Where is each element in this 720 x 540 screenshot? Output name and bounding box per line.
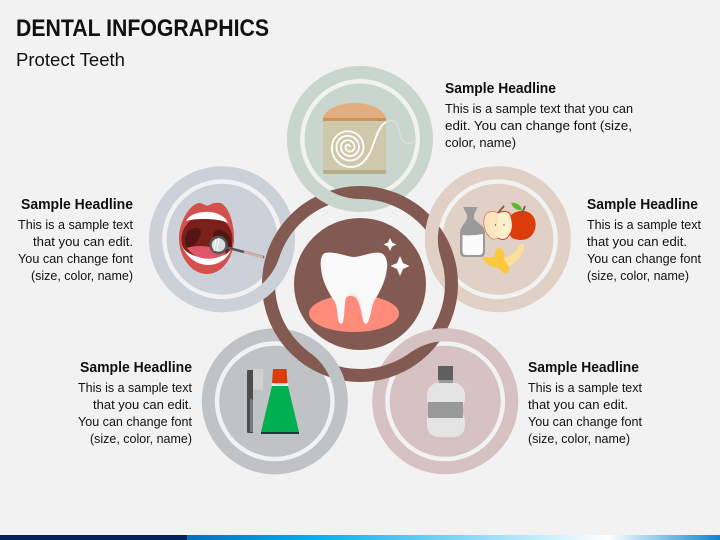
panel: dental floss circle [287, 66, 433, 212]
icon: dental floss [323, 103, 416, 174]
icon: toothpaste [261, 369, 299, 434]
icon: mouthwash bottle [427, 366, 465, 437]
panel: oral checkup circle [149, 166, 295, 312]
text block: left: This is a sample text [18, 217, 133, 232]
title: DENTAL INFOGRAPHICS [16, 15, 269, 42]
text block: bottom left: You can change font [78, 414, 192, 429]
text block: bottom right: You can change font [528, 414, 642, 429]
panel: healthy food circle [425, 166, 571, 312]
interlocking band: mouthwash circle over ring [406, 308, 538, 455]
text block: right: You can change font [587, 251, 701, 266]
brown central ring [268, 192, 452, 376]
text block: bottom right: Sample Headline [528, 360, 639, 376]
icon: gum [309, 295, 399, 332]
icon: open mouth with dental mirror [179, 203, 263, 274]
interlocking band: floss circle over ring [294, 72, 360, 206]
text block: top right [445, 81, 633, 150]
interlocking band: food circle over ring [414, 155, 561, 260]
icon: milk bottle [460, 207, 485, 257]
interlocking band: toothbrush circle over ring [236, 348, 368, 494]
text block: left: Sample Headline [21, 197, 133, 213]
panel: toothbrush and toothpaste circle [202, 328, 348, 474]
text block: top right: edit. You can change font (size, [445, 118, 632, 133]
icon: banana [482, 244, 524, 274]
text block: left: You can change font [18, 251, 133, 266]
text block: right: (size, color, name) [587, 268, 689, 283]
text block: bottom left: This is a sample text [78, 380, 192, 395]
text block: bottom right: (size, color, name) [528, 431, 630, 446]
text block: left: that you can edit. [33, 234, 133, 249]
icon: small sparkle [384, 238, 396, 251]
panel: mouthwash circle [372, 328, 518, 474]
footer bar [0, 535, 720, 540]
text block: bottom left: Sample Headline [80, 360, 192, 376]
text block: left [18, 197, 133, 283]
central tooth emblem [294, 218, 426, 350]
text block: right [587, 197, 701, 283]
subtitle: Protect Teeth [16, 49, 125, 70]
text block: top right: color, name) [445, 135, 516, 150]
text block: left: (size, color, name) [31, 268, 133, 283]
text block: right: Sample Headline [587, 197, 698, 213]
text block: bottom left: that you can edit. [93, 397, 192, 412]
text block: right: that you can edit. [587, 234, 687, 249]
icon: tooth [321, 253, 387, 324]
text block: bottom left [78, 360, 192, 446]
icon: toothbrush [247, 369, 263, 433]
text block: bottom right [528, 360, 642, 446]
text block: bottom right: This is a sample text [528, 380, 642, 395]
text block: top right: This is a sample text that you can [445, 101, 633, 116]
text block: right: This is a sample text [587, 217, 701, 232]
text block: bottom left: (size, color, name) [90, 431, 192, 446]
text block: top right: Sample Headline [445, 81, 556, 97]
icon: large sparkle [390, 256, 410, 276]
interlocking band: checkup circle over ring [138, 219, 285, 323]
icon: apples [484, 203, 536, 240]
text block: bottom right: that you can edit. [528, 397, 628, 412]
